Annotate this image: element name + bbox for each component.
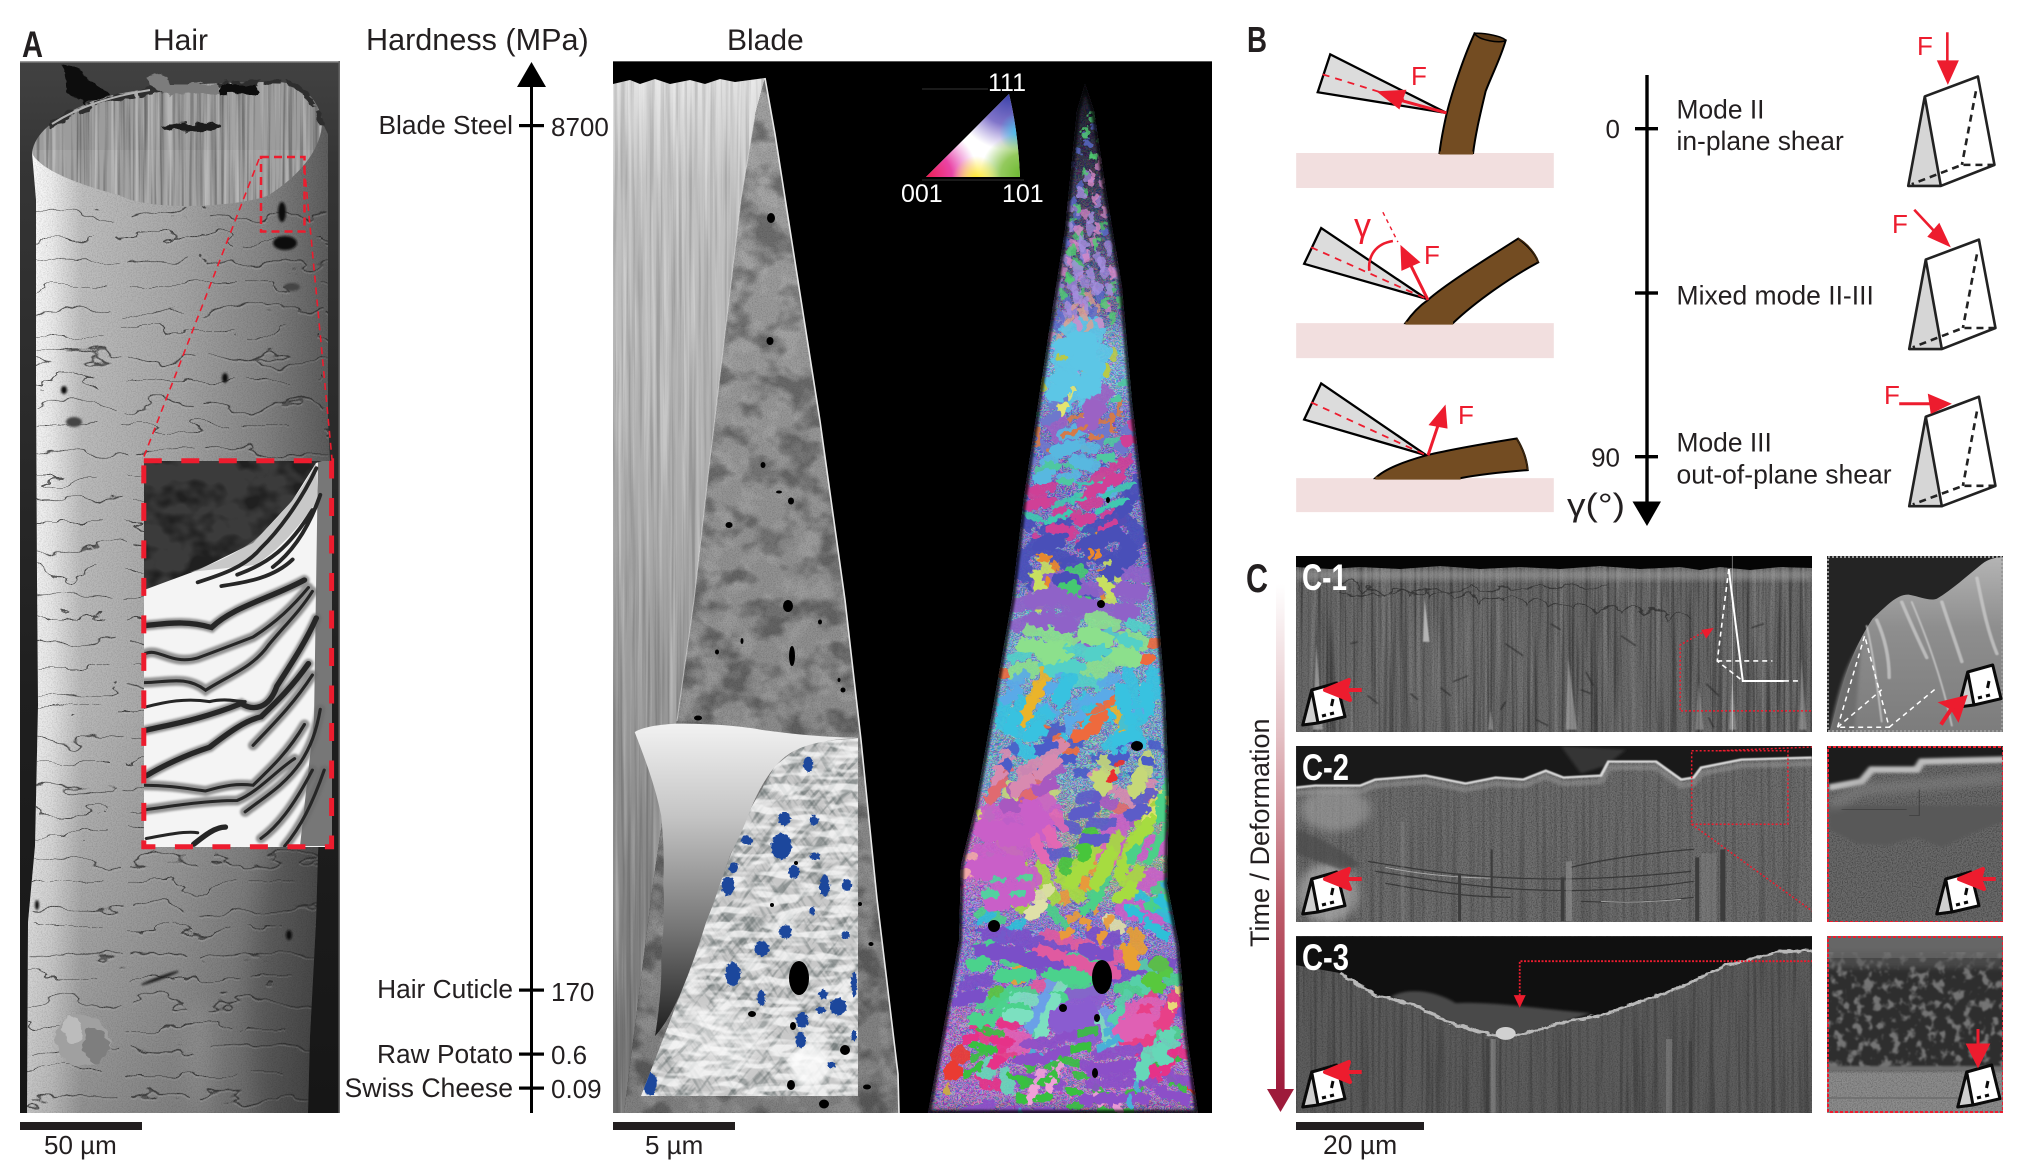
inset C-3 — [1827, 936, 2003, 1113]
panel label A: A — [22, 24, 43, 65]
panel label C: C — [1246, 557, 1268, 601]
mode III label: Mode III — [1676, 428, 1772, 458]
blade scale bar: 5 µm — [645, 1130, 703, 1160]
hardness tick: swiss cheese: Swiss Cheese — [344, 1073, 513, 1103]
hardness tick: blade steel — [378, 110, 609, 142]
prism icon: mixed mode load — [1909, 210, 1995, 349]
time / deformation arrow: Time / Deformation — [1245, 718, 1275, 947]
hardness tick: swiss cheese — [344, 1073, 602, 1104]
force label F, mode III: F — [1884, 380, 1900, 410]
mode angle axis: 0 — [1606, 114, 1620, 144]
schematic: in-plane cutting — [1296, 33, 1554, 188]
C-2 label: C-2 — [1302, 747, 1349, 788]
mode II label: in-plane shear — [1676, 126, 1844, 156]
hardness tick: blade steel: 8700 — [551, 112, 609, 142]
prism icon: mode III load — [1899, 394, 1995, 506]
mode angle axis: 90 — [1591, 442, 1620, 472]
hair scale bar: 50 µm — [44, 1130, 117, 1160]
inverse pole figure colour key: 001 — [901, 180, 943, 208]
hardness tick: raw potato — [377, 1039, 587, 1070]
force labels on schematics: F — [1458, 400, 1474, 430]
inverse pole figure colour key — [901, 69, 1044, 208]
C-3 prism icon — [1303, 1062, 1362, 1107]
image C-3 — [1296, 936, 1827, 1113]
surface pits and debris — [35, 202, 300, 986]
inset C-1 — [1827, 556, 2004, 734]
panel: blade micrographs — [613, 61, 1212, 1113]
schematic: out-of-plane cutting — [1296, 383, 1554, 512]
blade scale bar — [613, 1122, 735, 1160]
mixed mode label: Mixed mode II-III — [1676, 280, 1874, 310]
hair rim and debris — [51, 66, 322, 126]
mode II label — [1676, 94, 1844, 156]
force labels on schematics — [1354, 61, 1474, 430]
C-3 inset prism icon — [1958, 1029, 2000, 1107]
force label F, mixed mode: F — [1892, 209, 1908, 239]
C-2 inset prism icon — [1937, 869, 1996, 914]
force labels on schematics: F — [1424, 240, 1440, 270]
mode II label: Mode II — [1676, 94, 1765, 124]
time / deformation arrow — [1245, 584, 1294, 1112]
cut hair cross-section — [30, 80, 325, 215]
blade bright edges — [677, 78, 899, 1113]
panel label B: B — [1247, 19, 1267, 60]
force labels on schematics: F — [1411, 61, 1427, 91]
image C-2 — [1296, 746, 1827, 923]
C-1 prism icon — [1303, 680, 1362, 725]
hardness tick: swiss cheese: 0.09 — [551, 1074, 602, 1104]
striated blade flank — [613, 76, 773, 1113]
hardness tick: raw potato: 0.6 — [551, 1040, 587, 1070]
blade cross-section — [620, 76, 905, 1113]
dashed zoom guide lines and boxes — [143, 157, 332, 459]
mode angle axis: γ(°) — [1567, 487, 1625, 523]
mid-upper large and medium grains — [1052, 339, 1100, 395]
panel C scale bar: 20 µm — [1323, 1130, 1397, 1160]
lower purple and green band — [960, 950, 1107, 1000]
mode III label: out-of-plane shear — [1676, 460, 1892, 490]
voids in section — [694, 213, 874, 1108]
heading: Blade: Blade — [727, 24, 804, 57]
panel: cutting geometry schematics — [1296, 33, 1554, 512]
C-1 streaks and defects — [1313, 598, 1806, 730]
inset C-2 — [1827, 746, 2004, 922]
C-3 label: C-3 — [1302, 937, 1349, 978]
mode III label — [1676, 428, 1892, 490]
panel: hair micrograph — [20, 60, 350, 1176]
C-1 label: C-1 — [1302, 557, 1347, 598]
schematic: mixed-mode cutting — [1296, 212, 1554, 358]
hardness axis — [344, 62, 609, 1113]
EBSD band contrast inset with blue grains — [641, 738, 858, 1096]
force label F, mode II: F — [1917, 31, 1933, 61]
force labels on schematics: γ — [1354, 207, 1371, 245]
mid grains — [1030, 590, 1140, 625]
prism icon: mode II load — [1908, 32, 1994, 186]
C-1 surface scribbles — [1340, 581, 1692, 619]
C-1 red pointer — [1680, 628, 1827, 711]
magenta / yellow-green band — [975, 810, 1044, 900]
inverse pole figure colour key: 111 — [988, 69, 1026, 97]
hardness tick: hair cuticle: Hair Cuticle — [377, 974, 513, 1004]
black voids in orientation map — [988, 497, 1143, 1078]
image C-1 — [1296, 556, 1827, 732]
zoomed inset of hair surface — [144, 461, 332, 847]
mode angle axis — [1567, 75, 1892, 526]
hardness tick: hair cuticle: 170 — [551, 977, 594, 1007]
heading: Hardness (MPa): Hardness (MPa) — [366, 23, 589, 57]
panel C scale bar — [1296, 1122, 1424, 1160]
hair shaft body — [27, 125, 330, 1113]
C-1 inset prism icon — [1941, 665, 2001, 724]
dim upper grains — [1060, 130, 1113, 328]
hardness tick: hair cuticle — [377, 974, 594, 1007]
EBSD orientation map — [925, 80, 1205, 1118]
hair scale bar — [20, 1122, 142, 1160]
heading: Hair: Hair — [153, 24, 208, 57]
C-1 prism overlay lines — [1717, 556, 1799, 732]
inverse pole figure colour key: 101 — [1002, 180, 1044, 208]
C-2 prism icon — [1303, 869, 1362, 914]
hardness tick: blade steel: Blade Steel — [378, 110, 513, 140]
peeled page-curl overlay — [635, 724, 857, 1036]
hardness tick: raw potato: Raw Potato — [377, 1039, 513, 1069]
inset dashed frame — [144, 461, 332, 847]
